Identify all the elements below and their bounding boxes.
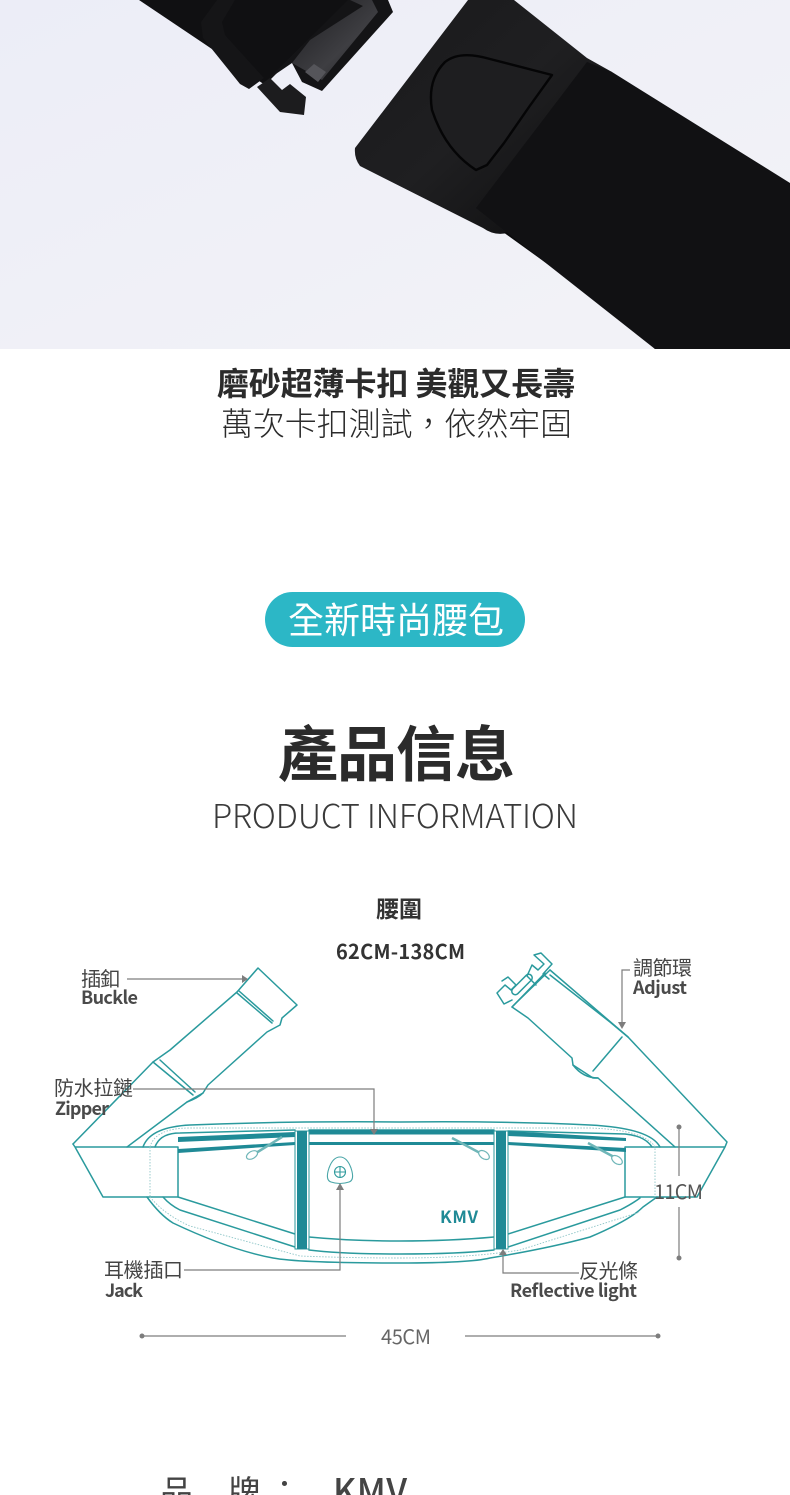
callout: headphone jack xyxy=(104,1183,344,1303)
callout: reflective strip: Reflective light xyxy=(510,1277,637,1303)
callout: buckle: Buckle xyxy=(81,984,138,1010)
left strap xyxy=(73,968,297,1197)
bag outlines xyxy=(143,1122,660,1263)
dimension: height 11CM xyxy=(654,1124,703,1260)
icon: headphone jack xyxy=(327,1157,353,1184)
callout: waterproof zipper: Zipper xyxy=(55,1095,109,1121)
right buckle D-shaped hook xyxy=(431,55,552,170)
callout: headphone jack: Jack xyxy=(105,1277,143,1303)
callout: reflective strip xyxy=(499,1249,638,1303)
spec line: brand xyxy=(160,1464,407,1495)
dimension: height 11CM: 11CM xyxy=(654,1176,703,1205)
left buckle plate xyxy=(267,0,393,91)
subtitle: PRODUCT INFORMATION: PRODUCT INFORMATION xyxy=(212,790,578,838)
zipper pulls xyxy=(245,1137,624,1166)
right buckle plate xyxy=(355,0,612,234)
callout: buckle: 插釦 xyxy=(81,963,120,992)
value: waist range: 62CM-138CM xyxy=(336,936,465,965)
callout: reflective strip: 反光條 xyxy=(579,1255,638,1284)
callout: buckle xyxy=(81,963,248,1010)
reflective strips xyxy=(295,1131,508,1249)
dimension: width 45CM: 45CM xyxy=(381,1321,431,1350)
right strap xyxy=(512,970,727,1197)
label: waist size: 腰圍 xyxy=(376,890,422,924)
subheading: buckle test: 萬次卡扣測試，依然牢固 xyxy=(221,399,572,445)
title: product information: 產品信息 xyxy=(278,707,515,794)
left buckle tab xyxy=(257,78,306,115)
badge: new fashion waist bag: 全新時尚腰包 xyxy=(288,592,504,644)
heading: matte buckle: 磨砂超薄卡扣 美觀又長壽 xyxy=(217,359,575,405)
callout: adjuster: Adjust xyxy=(632,974,687,1000)
left buckle frame xyxy=(201,0,264,89)
photo: black belt buckle on pale background xyxy=(0,0,790,349)
elastic strap xyxy=(476,62,790,349)
callout: adjuster: 調節環 xyxy=(633,952,692,981)
callout: waterproof zipper xyxy=(54,1072,378,1135)
diagram: waist bag line drawing xyxy=(73,953,727,1263)
zipper bands xyxy=(178,1130,626,1153)
logo: KMV: KMV xyxy=(440,1203,478,1228)
elastic strap underlayer xyxy=(503,232,720,349)
icon: adjuster ladder xyxy=(497,953,552,1004)
callout: adjuster xyxy=(618,952,692,1029)
callout: headphone jack: 耳機插口 xyxy=(104,1254,183,1283)
dimension: width 45CM xyxy=(140,1321,660,1350)
callout: waterproof zipper: 防水拉鏈 xyxy=(54,1072,133,1101)
left strap xyxy=(139,0,350,85)
